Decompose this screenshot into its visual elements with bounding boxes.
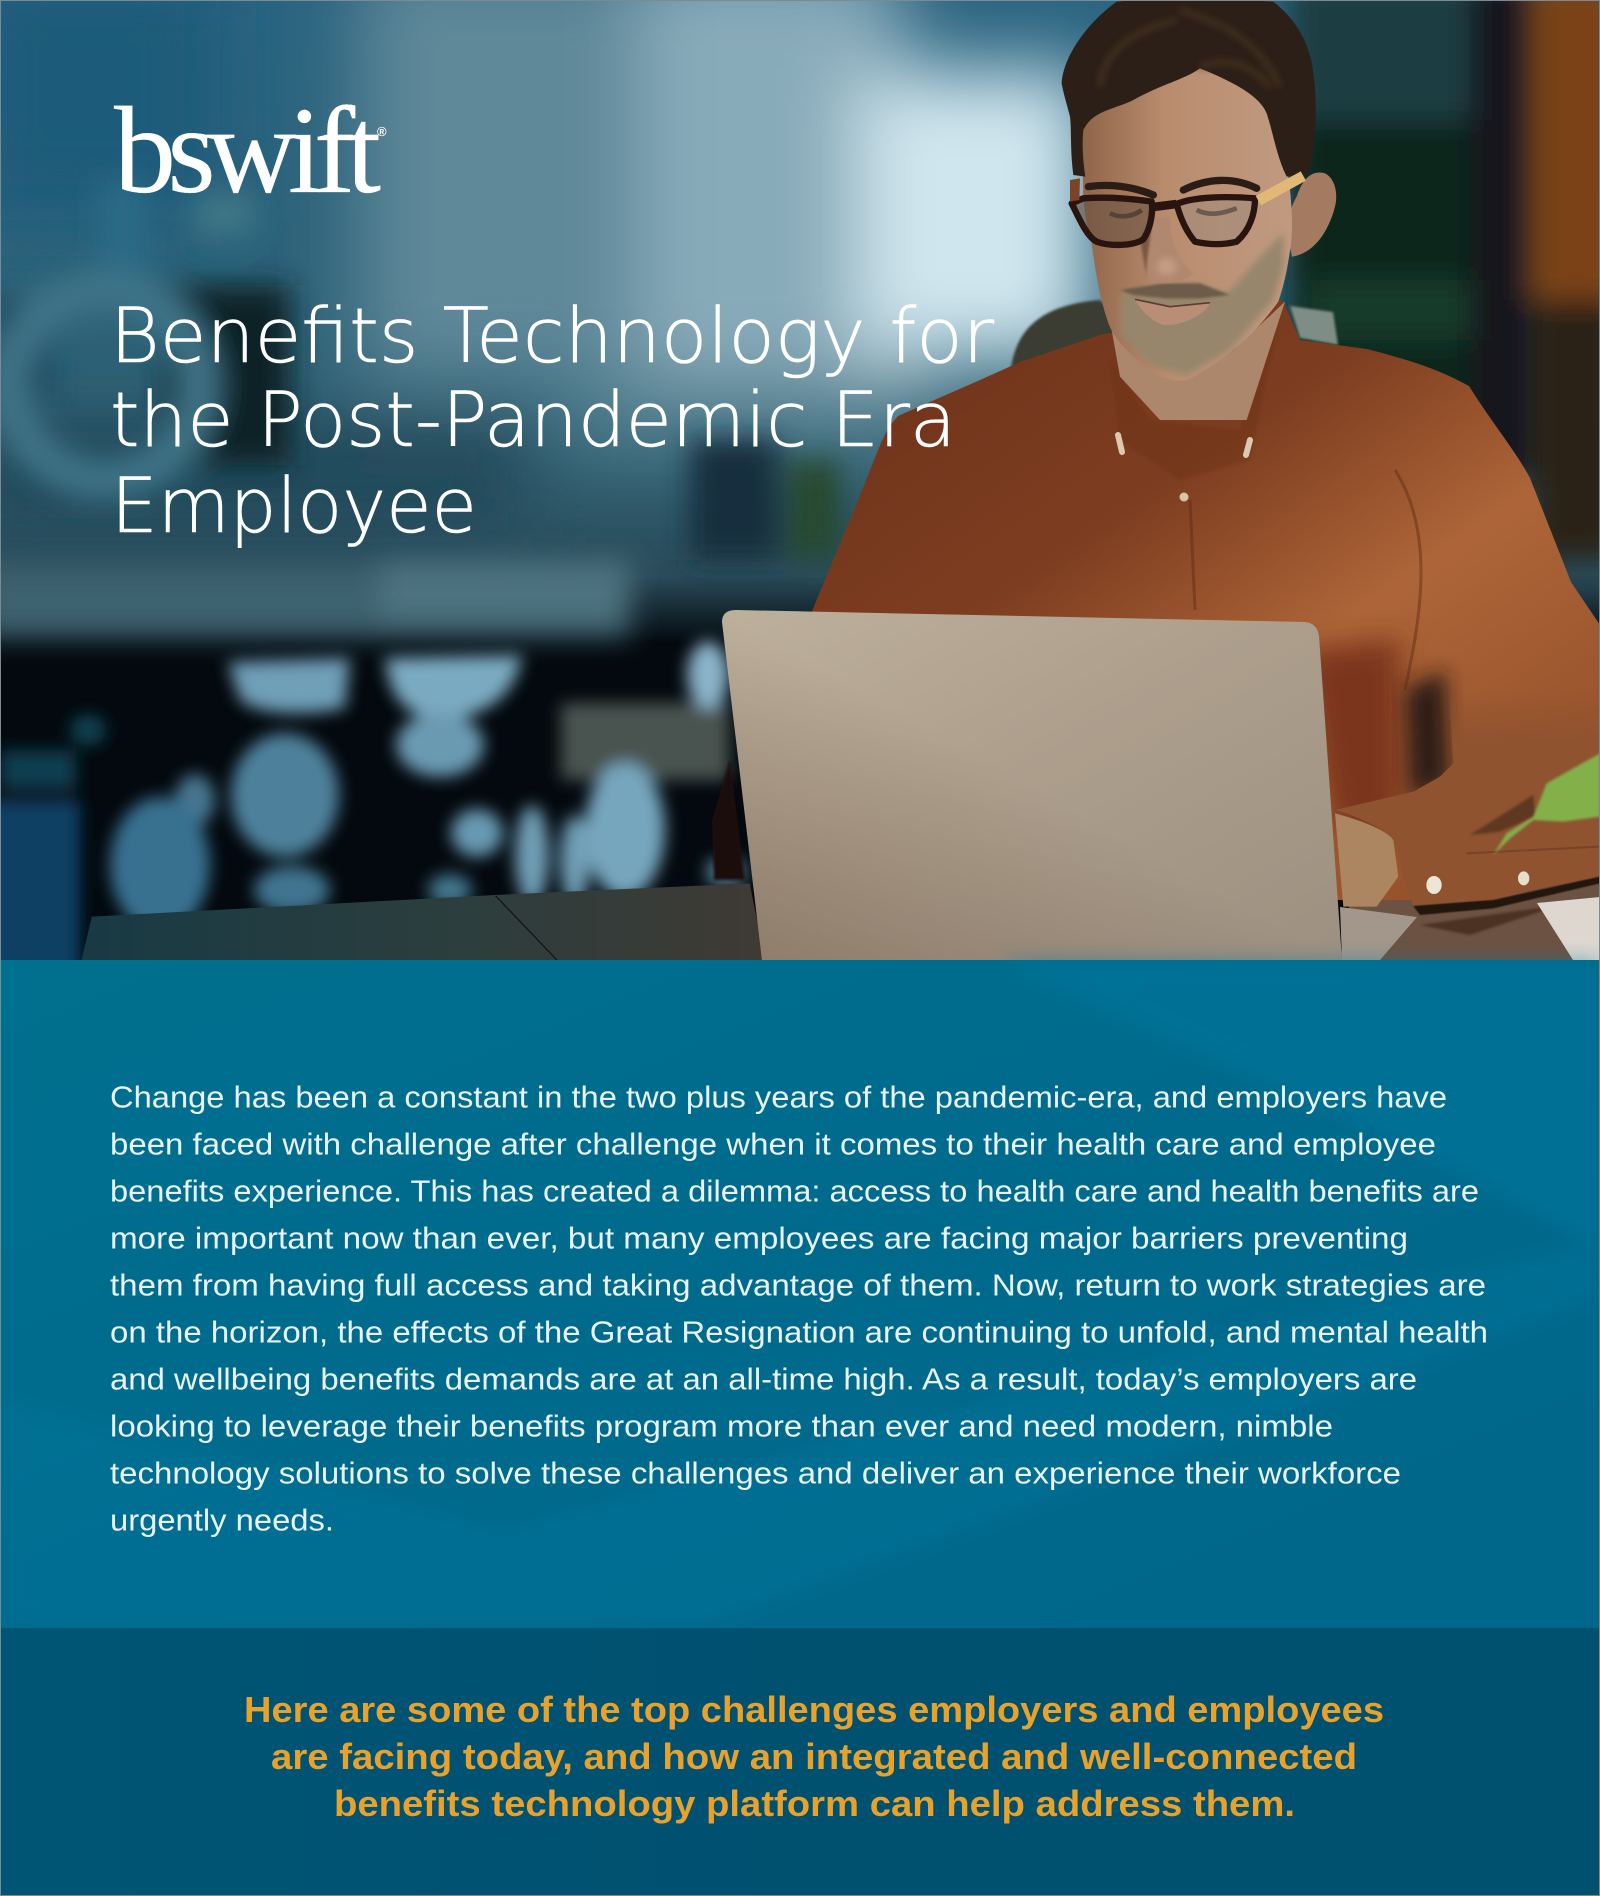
intro paragraph: on the horizon, the effects of the Great Resignation are continuing to unfold, and mental health <box>110 1314 1488 1350</box>
intro paragraph <box>110 1080 1488 1538</box>
neck <box>1112 302 1285 420</box>
intro paragraph: been faced with challenge after challenge when it comes to their health care and employee <box>110 1126 1436 1162</box>
moustache and lips <box>1120 283 1230 325</box>
head <box>1062 0 1336 420</box>
intro paragraph: urgently needs. <box>110 1502 334 1538</box>
intro paragraph: them from having full access and taking advantage of them. Now, return to work strategies are <box>110 1268 1486 1302</box>
face <box>1082 50 1292 381</box>
eyebrows and eyes <box>1088 180 1257 216</box>
desk <box>82 875 1600 960</box>
call to action text: Here are some of the top challenges employers and employees <box>244 1689 1384 1730</box>
nose <box>1140 217 1193 283</box>
hero photo: man working on a laptop <box>0 0 1600 980</box>
sleeve, hand and cuff <box>1335 709 1599 916</box>
glasses <box>1070 176 1303 245</box>
laptop <box>722 610 1417 960</box>
intro paragraph: benefits experience. This has created a dilemma: access to health care and health benefits are <box>110 1174 1479 1208</box>
title: the Post-Pandemic Era <box>110 375 956 464</box>
logo: bswift: ® <box>377 124 387 139</box>
ear <box>1288 173 1336 257</box>
blurred office background, upper <box>0 0 1090 637</box>
panel: call to action <box>0 1628 1600 1896</box>
stubble <box>1120 233 1283 375</box>
call to action text <box>244 1689 1384 1824</box>
blurred office background, right <box>1290 0 1600 560</box>
blurred office background, lower left <box>0 641 744 980</box>
title <box>110 291 995 550</box>
call to action text: are facing today, and how an integrated and well-connected <box>271 1736 1357 1777</box>
shirt <box>712 300 1600 900</box>
hair <box>1062 0 1316 177</box>
intro paragraph: more important now than ever, but many employees are facing major barriers preventing <box>110 1220 1408 1256</box>
intro paragraph: and wellbeing benefits demands are at an all-time high. As a result, today’s employers are <box>110 1362 1417 1396</box>
intro paragraph: looking to leverage their benefits program more than ever and need modern, nimble <box>110 1408 1333 1444</box>
leaf <box>1493 753 1600 855</box>
title: Benefits Technology for <box>110 291 995 380</box>
call to action text: benefits technology platform can help address them. <box>334 1783 1295 1824</box>
intro paragraph: technology solutions to solve these challenges and deliver an experience their workforce <box>110 1456 1401 1490</box>
panel: intro <box>0 960 1600 1628</box>
intro paragraph: Change has been a constant in the two plus years of the pandemic-era, and employers have <box>110 1080 1447 1114</box>
chair <box>1010 298 1340 366</box>
title: Employee <box>111 461 477 550</box>
logo: bswift: bswift <box>114 82 381 219</box>
